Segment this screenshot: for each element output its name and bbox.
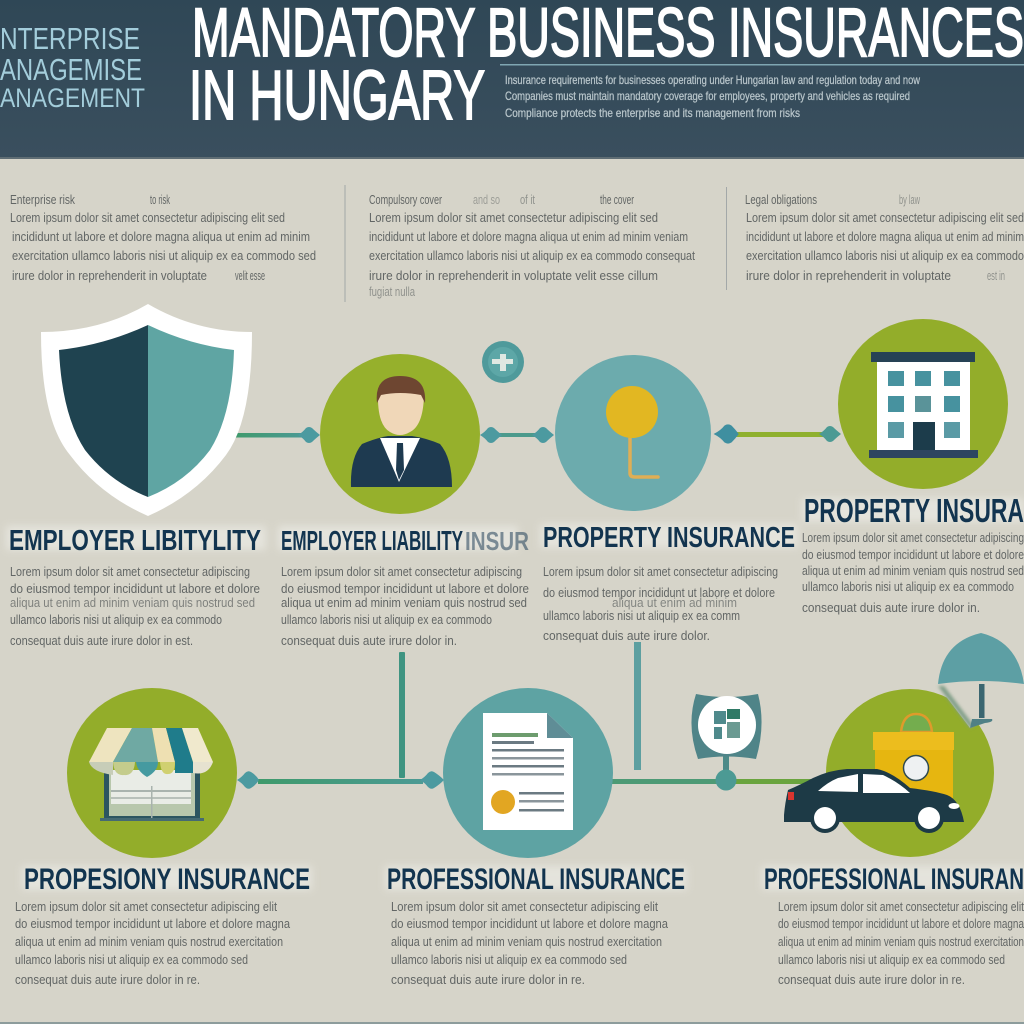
intro column 3: irure dolor in reprehenderit in voluptate [746, 269, 951, 283]
connector: top row [233, 424, 841, 444]
car [784, 769, 964, 833]
heading: EMPLOYER LIBITYLITY [9, 525, 261, 557]
body text: ullamco laboris nisi ut aliquip ex ea commodo sed [391, 953, 627, 967]
connector: bottom row [237, 642, 822, 789]
body text: ullamco laboris nisi ut aliquip ex ea commodo sed [15, 953, 248, 967]
body text [802, 531, 1024, 615]
body text: aliqua ut enim ad minim veniam quis nostrud exercitation [15, 935, 283, 949]
heading: PROPERTY INSURANCE [543, 522, 795, 554]
heading: EMPLOYER LIABILITY [281, 525, 463, 556]
icon: document circle [443, 688, 613, 858]
intro column 2: the cover [600, 193, 634, 207]
body text: Lorem ipsum dolor sit amet consectetur adipiscing elit [15, 900, 277, 914]
intro column 3: by law [899, 193, 921, 207]
umbrella [938, 633, 1024, 728]
header band [0, 0, 1024, 159]
bottom edge strip [0, 1022, 1024, 1024]
card: propesiony insurance [15, 863, 310, 987]
body text: do eiusmod tempor incididunt ut labore et dolore magna [391, 917, 668, 931]
body text: aliqua ut enim ad minim [612, 596, 737, 610]
intro column 2: of it [520, 193, 535, 207]
title: IN HUNGARY [189, 56, 485, 134]
intro column 2: exercitation ullamco laboris nisi ut aliquip ex ea commodo consequat [369, 249, 695, 263]
intro column 2: Compulsory cover [369, 193, 442, 207]
body text: aliqua ut enim ad minim veniam quis nostrud sed [281, 596, 527, 610]
body text: Lorem ipsum dolor sit amet consectetur adipiscing [10, 565, 250, 579]
body text [543, 565, 778, 643]
body text: consequat duis aute irure dolor. [543, 629, 710, 643]
body text: ullamco laboris nisi ut aliquip ex ea commodo [281, 613, 492, 627]
icon: employee circle [320, 354, 480, 514]
intro column 3 [745, 193, 1024, 283]
icon: shop circle [67, 688, 237, 858]
icon: shield [41, 304, 252, 516]
body text: Lorem ipsum dolor sit amet consectetur adipiscing elit [391, 900, 658, 914]
body text: consequat duis aute irure dolor in est. [10, 634, 193, 648]
card: employer liability B [281, 525, 529, 648]
intro column 1: incididunt ut labore et dolore magna aliqua ut enim ad minim [12, 230, 310, 244]
header description [505, 73, 920, 120]
intro column 1: Enterprise risk [10, 193, 76, 207]
body text: ullamco laboris nisi ut aliquip ex ea commodo [10, 613, 222, 627]
card: employer liability A [9, 525, 261, 648]
body text: consequat duis aute irure dolor in. [281, 634, 457, 648]
intro column 2: incididunt ut labore et dolore magna aliqua ut enim ad minim veniam [369, 230, 688, 244]
title [189, 0, 1024, 134]
body text: consequat duis aute irure dolor in re. [15, 973, 200, 987]
heading: INSUR [465, 526, 529, 556]
icon: car and bag circle [784, 633, 1024, 857]
icon: certificate badge [691, 694, 762, 790]
logo wordmark: NTERPRISE [0, 21, 140, 56]
body text: do eiusmod tempor incididunt ut labore et dolore [281, 582, 529, 596]
body text: consequat duis aute irure dolor in. [802, 601, 980, 615]
intro column 2: irure dolor in reprehenderit in voluptate velit esse cillum [369, 269, 658, 283]
body text: ullamco laboris nisi ut aliquip ex ea comm [543, 609, 740, 623]
intro column 2: and so [473, 193, 500, 207]
icon: plus badge [482, 341, 524, 383]
body text: do eiusmod tempor incididunt ut labore et dolore [543, 586, 775, 600]
body text: aliqua ut enim ad minim veniam quis nostrud sed [10, 596, 255, 610]
body text: aliqua ut enim ad minim veniam quis nostrud exercitation [391, 935, 662, 949]
intro column 1: to risk [150, 193, 170, 207]
body text: consequat duis aute irure dolor in re. [778, 973, 965, 987]
header description: Compliance protects the enterprise and its management from risks [505, 106, 800, 120]
body text [778, 900, 1024, 987]
intro column 1: velit esse [235, 269, 265, 283]
logo wordmark: ANAGEMISE [0, 52, 142, 87]
icon: property circle with pin [555, 355, 711, 511]
logo wordmark [0, 21, 145, 113]
intro column 3: est in [987, 269, 1005, 283]
body text: do eiusmod tempor incididunt ut labore et dolore magna [15, 917, 290, 931]
logo wordmark: ANAGEMENT [0, 83, 145, 113]
intro column 1: Lorem ipsum dolor sit amet consectetur adipiscing elit sed [10, 211, 285, 225]
body text [15, 900, 290, 987]
header description: Companies must maintain mandatory coverage for employees, property and vehicles as required [505, 89, 910, 103]
heading glow band [6, 498, 1024, 890]
intro column 1 [10, 193, 316, 283]
card: professional insurance B [764, 863, 1024, 987]
card: property insurance B [802, 492, 1024, 615]
body text: Lorem ipsum dolor sit amet consectetur adipiscing [281, 565, 522, 579]
icon: building circle [838, 319, 1008, 489]
body text [391, 900, 668, 987]
body text [10, 565, 260, 648]
divider 2 [726, 187, 727, 290]
heading: PROPESIONY INSURANCE [24, 863, 310, 896]
divider 1 [344, 185, 346, 302]
bag [873, 714, 954, 800]
intro column 2: fugiat nulla [369, 285, 415, 299]
intro column 1: irure dolor in reprehenderit in voluptate [12, 269, 207, 283]
card: property insurance A [543, 522, 795, 643]
intro column 2: Lorem ipsum dolor sit amet consectetur adipiscing elit sed [369, 211, 658, 225]
body text [281, 565, 529, 648]
header description: Insurance requirements for businesses operating under Hungarian law and regulation today and now [505, 73, 920, 87]
body text: consequat duis aute irure dolor in re. [391, 973, 585, 987]
intro column 3: Legal obligations [745, 193, 817, 207]
body text: Lorem ipsum dolor sit amet consectetur adipiscing [543, 565, 778, 579]
card: professional insurance A [387, 863, 685, 987]
body text: do eiusmod tempor incididunt ut labore et dolore [10, 582, 260, 596]
heading: PROFESSIONAL INSURANCE [387, 863, 685, 896]
intro column 1: exercitation ullamco laboris nisi ut aliquip ex ea commodo sed [12, 249, 316, 263]
intro column 2 [369, 193, 695, 299]
